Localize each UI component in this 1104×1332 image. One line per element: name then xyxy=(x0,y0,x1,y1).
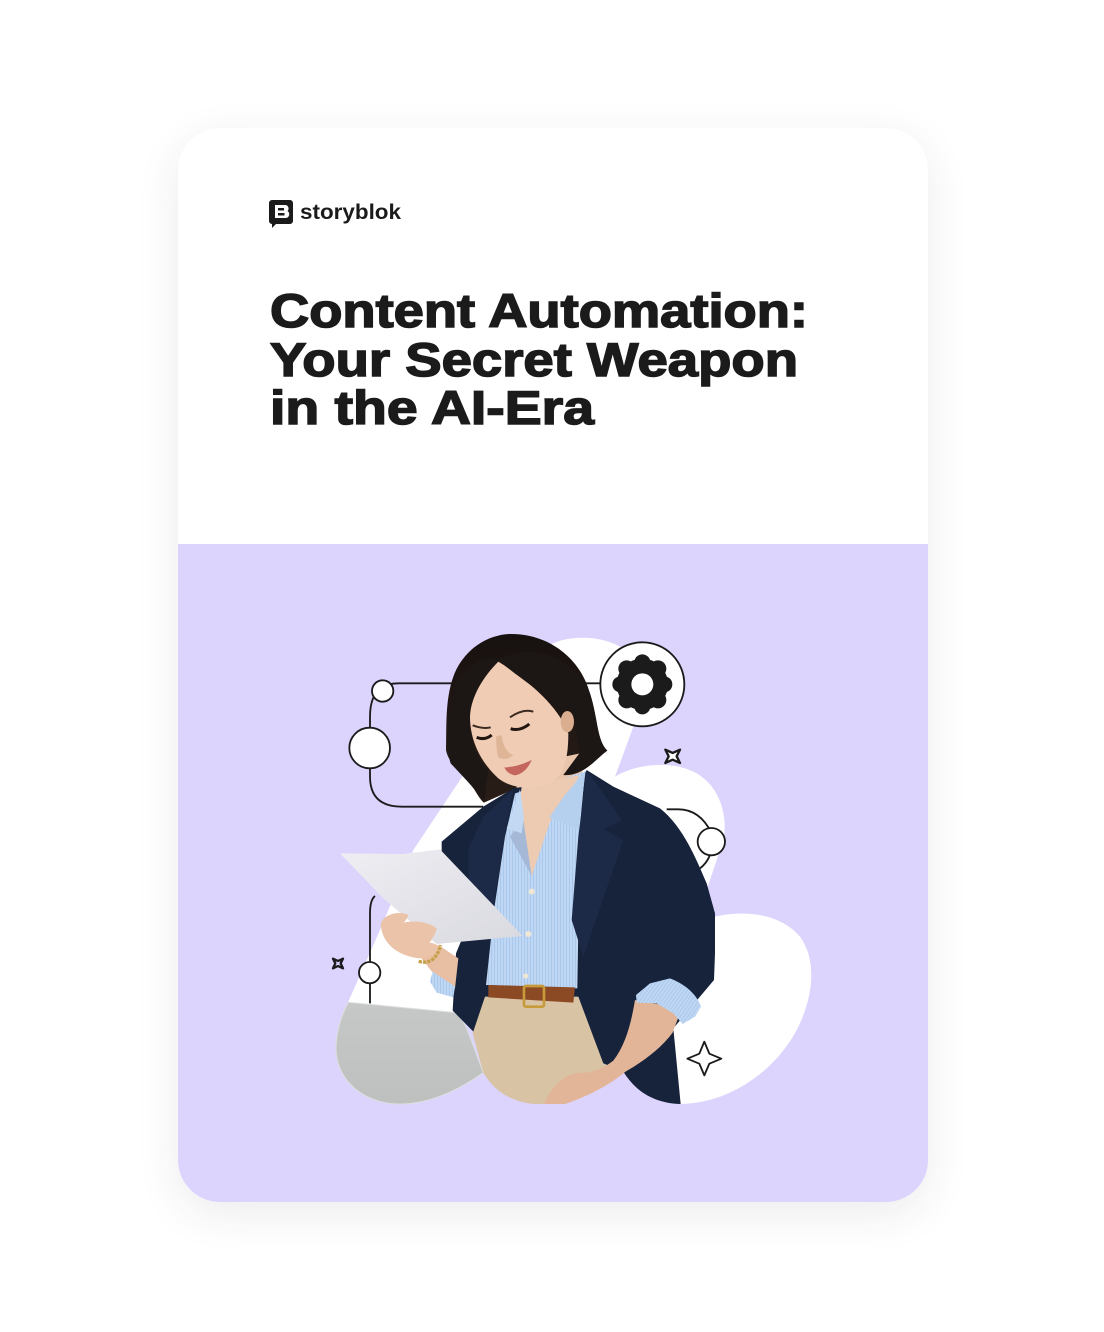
hair back xyxy=(446,634,607,803)
left forearm xyxy=(420,945,458,988)
connector lines xyxy=(370,683,712,1003)
white blob background xyxy=(340,638,811,1104)
face xyxy=(470,662,568,788)
shirt placket shadow xyxy=(510,820,532,876)
title: in the AI-Era xyxy=(270,381,595,434)
trousers xyxy=(473,997,622,1104)
mouth xyxy=(504,760,532,775)
panel: cover card xyxy=(178,128,928,1202)
title xyxy=(270,284,808,434)
lapel left xyxy=(468,789,513,907)
blazer xyxy=(442,770,715,1104)
laptop xyxy=(336,1002,483,1104)
right shirt cuff xyxy=(636,978,701,1024)
panel: lilac lower section xyxy=(178,544,928,1202)
shirt buttons xyxy=(523,889,535,979)
hand holding paper xyxy=(381,913,440,958)
belt xyxy=(488,985,575,1007)
node circles xyxy=(349,680,725,983)
ear xyxy=(561,711,574,732)
icon: sparkles xyxy=(333,750,721,1075)
illustration: woman reading with automation graphics xyxy=(333,634,811,1104)
bracelet xyxy=(419,945,441,962)
left shirt cuff xyxy=(430,972,455,997)
nose shadow xyxy=(496,735,513,759)
logo: storyblok: storyblok xyxy=(300,201,401,224)
eyebrows xyxy=(473,711,533,728)
icon: gear xyxy=(600,642,684,726)
lapel right xyxy=(572,770,623,957)
skin opening xyxy=(517,775,580,876)
shirt xyxy=(486,772,585,988)
neck and chest xyxy=(517,753,583,877)
collars xyxy=(507,789,524,833)
hair front xyxy=(448,652,607,802)
title: Your Secret Weapon xyxy=(270,333,798,386)
right forearm and hand xyxy=(544,1000,682,1104)
eyes xyxy=(477,724,529,739)
person xyxy=(340,634,715,1104)
title: Content Automation: xyxy=(270,284,808,337)
paper xyxy=(340,849,523,944)
logo: storyblok xyxy=(269,200,401,228)
